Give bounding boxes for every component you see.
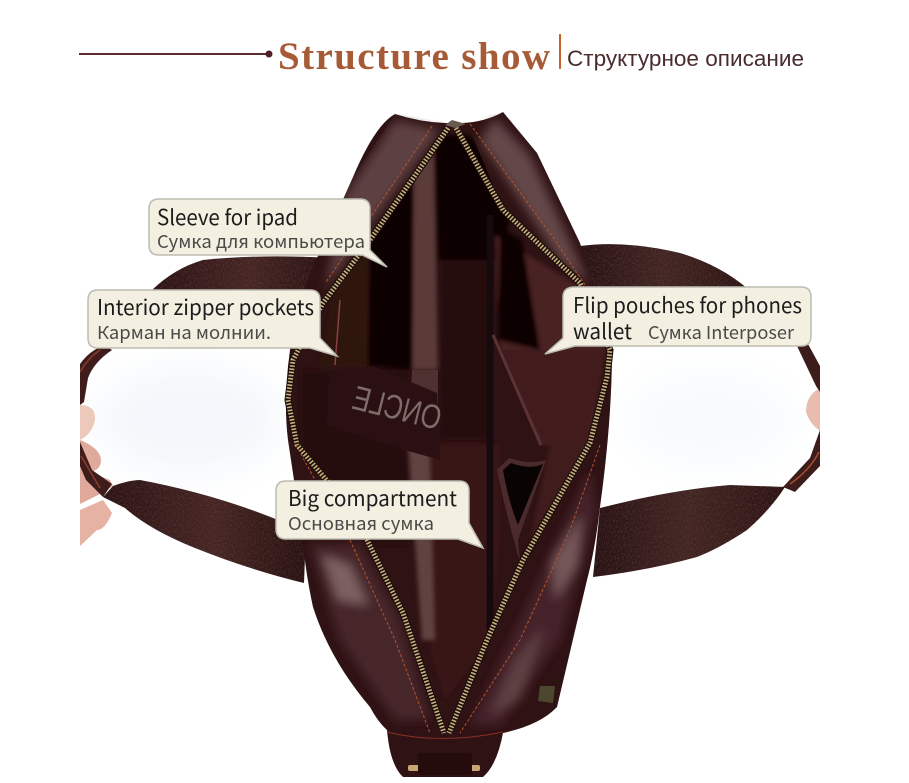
callout: big compartment [276,481,483,548]
heading: Russian subtitle: Структурное описание [567,46,804,71]
pocket piping [335,300,340,365]
interior strap with woven logo [352,366,440,460]
interior strap with woven logo: ONCLE [349,379,445,438]
zipper pull [445,120,466,128]
callout label: Flip pouches for phones [573,289,802,320]
bag leather highlights [300,118,596,725]
callout: flip pouches [545,287,811,354]
left strap: lower [103,480,306,583]
bag body [286,112,612,777]
callout: interior zipper pockets [88,290,337,356]
callout label: Карман на молнии. [97,319,271,345]
left strap: edge [80,345,112,497]
side buckle [538,686,555,703]
left hand [80,405,113,546]
right strap: lower [593,485,785,577]
photo: open leather bag [80,112,820,777]
right strap: upper [580,244,745,286]
right strap: edge [783,344,820,492]
zipper left [288,128,448,733]
callout label: Основная сумка [288,510,434,536]
diagonal flap [493,335,541,445]
callout label: Сумка Interposer [648,319,795,345]
callout: sleeve for ipad [149,199,387,267]
callout label [97,291,314,345]
callout label: Sleeve for ipad [157,201,298,232]
callout label: Сумка для компьютера [157,228,365,254]
callout label [288,482,457,536]
title separator [559,34,561,69]
callout label [573,289,802,346]
center seam [486,215,494,630]
heading: Structure show: Structure show [278,35,550,78]
inner pocket [497,458,546,562]
bag interior lining [296,133,606,694]
orange stitching [296,124,600,738]
title rule and dot [79,50,272,58]
zipper right [449,128,610,733]
callout label [157,201,365,254]
callout label: Interior zipper pockets [97,291,314,322]
callout label: wallet [573,315,632,346]
right hand [806,388,820,431]
bottom tab with rivets [408,753,480,775]
pale studio background [113,378,267,462]
left strap: upper [152,256,318,290]
callout label: Big compartment [288,482,457,513]
center lining strip [412,145,438,370]
title [79,34,804,78]
